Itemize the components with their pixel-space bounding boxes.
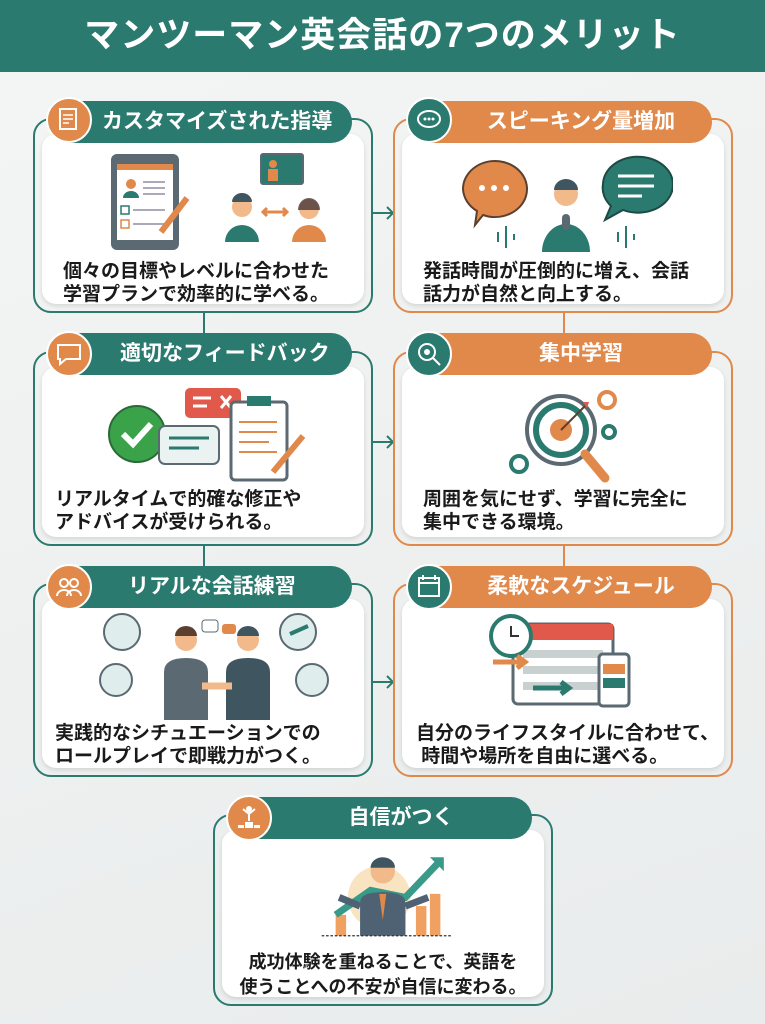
illustration: handshake (99, 613, 329, 720)
heading: 適切なフィードバック (120, 342, 330, 365)
arrow: card5 to card6 (373, 675, 393, 689)
text: 時間や場所を自由に選べる。 (421, 746, 668, 767)
heading: 集中学習 (539, 342, 623, 365)
text (423, 488, 688, 533)
text: 成功体験を重ねることで、英語を (249, 952, 517, 972)
title: マンツーマン英会話の7つのメリット (84, 16, 681, 55)
text: 話力が自然と向上する。 (423, 284, 632, 305)
icon: document (46, 97, 92, 143)
heading: リアルな会話練習 (128, 575, 296, 598)
text (55, 722, 321, 767)
text: 周囲を気にせず、学習に完全に (423, 489, 688, 510)
text: 発話時間が圧倒的に増え、会話 (423, 261, 689, 282)
panel: appropriate feedback (33, 331, 373, 546)
text: 集中できる環境。 (423, 512, 575, 533)
arrow: card1 to card2 (373, 206, 393, 220)
icon: speech bubble (406, 97, 452, 143)
panel: speaking volume (393, 97, 733, 313)
text (55, 488, 301, 533)
illustration: speech bubbles (462, 156, 673, 252)
text: 自分のライフスタイルに合わせて、 (416, 723, 719, 744)
panel: real conversation practice (33, 564, 373, 777)
panel: customized instruction (33, 97, 373, 313)
text: リアルタイムで的確な修正や (55, 489, 301, 510)
illustration: confident man with chart (322, 857, 451, 936)
icon: podium (226, 795, 272, 841)
illustration: tablet and people (111, 153, 326, 250)
heading: 自信がつく (348, 806, 454, 829)
illustration: target magnifier (509, 390, 617, 482)
arrow: card3 to card4 (373, 435, 393, 449)
panel: gain confidence (213, 795, 553, 1006)
text (63, 260, 329, 305)
icon: calendar (406, 564, 452, 610)
heading (410, 333, 712, 375)
panel: flexible schedule (393, 564, 733, 777)
heading (50, 333, 352, 375)
icon: message (46, 331, 92, 377)
text (239, 952, 527, 997)
text: ロールプレイで即戦力がつく。 (55, 746, 321, 767)
icon: people (46, 564, 92, 610)
text: 実践的なシチュエーションでの (55, 723, 321, 744)
heading (50, 566, 352, 608)
heading (410, 566, 712, 608)
heading (50, 101, 352, 143)
text: 学習プランで効率的に学べる。 (63, 284, 329, 305)
illustration: clock, calendar, phone (489, 614, 630, 708)
text (423, 260, 689, 305)
heading: 柔軟なスケジュール (487, 575, 675, 598)
text: 使うことへの不安が自信に変わる。 (239, 977, 527, 997)
icon: target (406, 331, 452, 377)
heading (410, 101, 712, 143)
text: アドバイスが受けられる。 (55, 512, 282, 533)
heading (230, 797, 532, 839)
heading: カスタマイズされた指導 (102, 110, 332, 133)
title (0, 0, 765, 72)
text (416, 722, 719, 767)
illustration: check, bubbles, clipboard (108, 388, 306, 482)
text: 個々の目標やレベルに合わせた (63, 261, 329, 282)
panel: focused learning (393, 331, 733, 546)
heading: スピーキング量増加 (487, 110, 675, 133)
